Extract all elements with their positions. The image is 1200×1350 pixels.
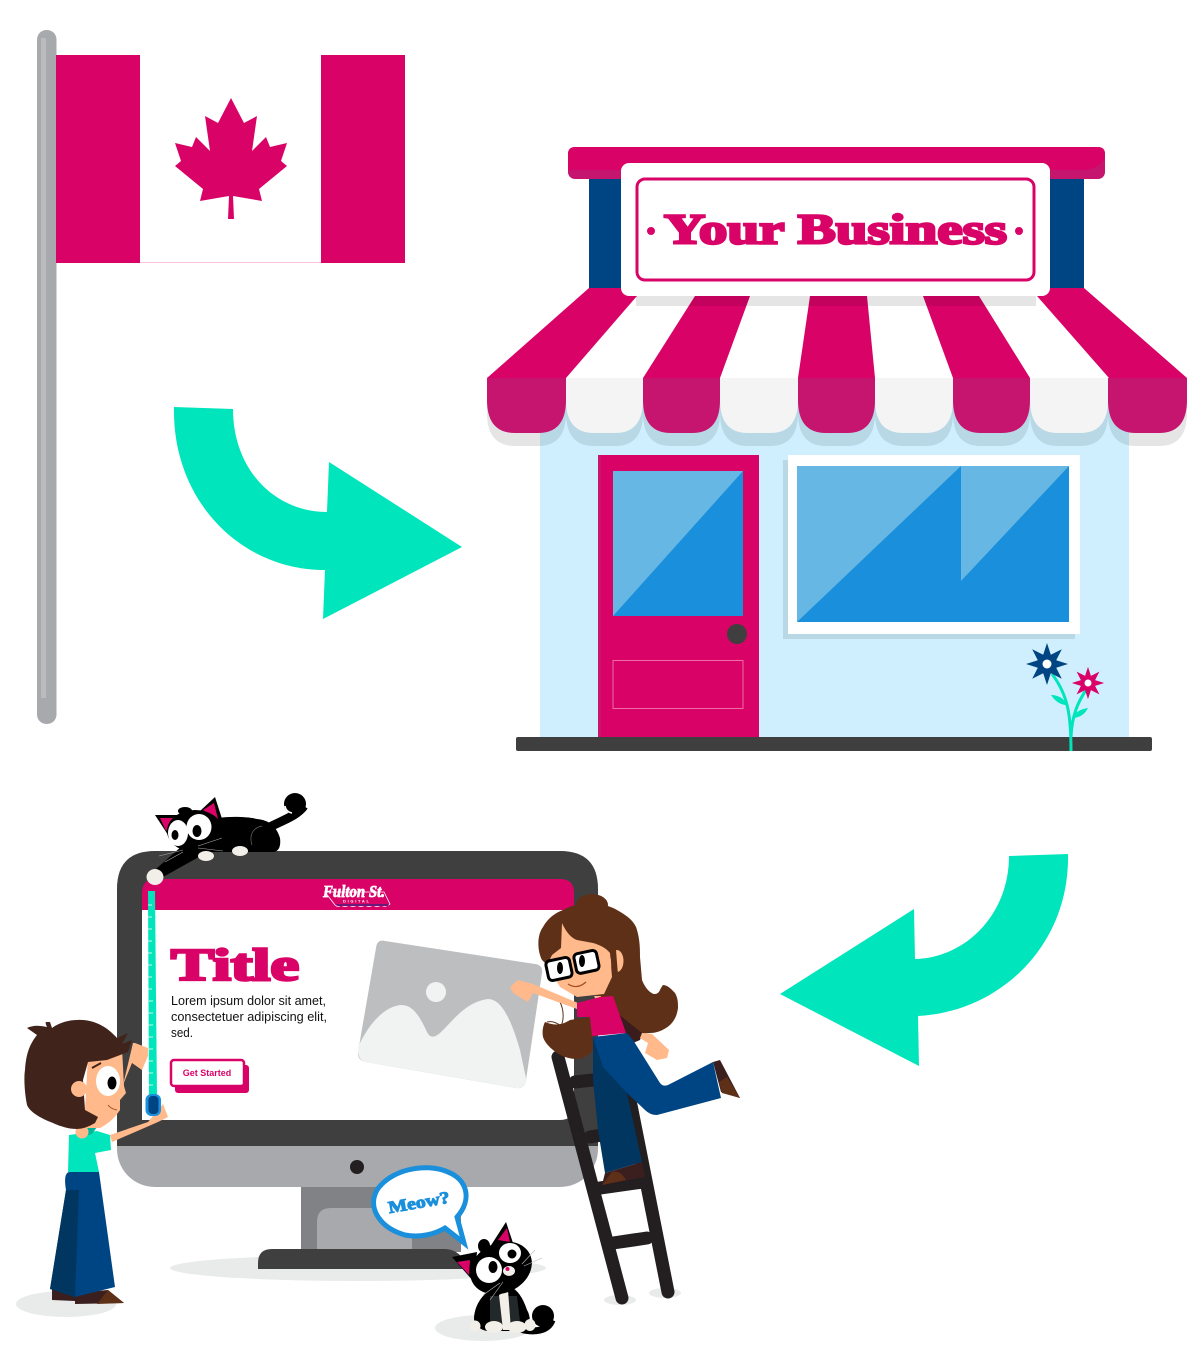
cat lying on monitor <box>146 793 306 885</box>
ground shadows <box>16 1255 681 1341</box>
boy shirt <box>68 1127 111 1172</box>
girl shoes <box>602 1060 740 1185</box>
girl hair bun <box>576 894 608 916</box>
logo: Fulton St. <box>322 882 385 901</box>
monitor body <box>117 851 598 1187</box>
flag cloth <box>56 55 405 263</box>
roof bar <box>568 147 1105 179</box>
cat eyes <box>168 814 212 846</box>
sitting cat eyes <box>476 1243 521 1283</box>
boy eyebrow <box>92 1063 101 1068</box>
boy smile <box>108 1105 117 1110</box>
arrow: flag to storefront <box>174 407 462 619</box>
girl front leg <box>593 1033 721 1115</box>
cat arm <box>146 846 206 885</box>
speech bubble <box>374 1168 466 1243</box>
monitor stand <box>301 1180 461 1252</box>
shop window <box>783 455 1080 639</box>
girl lower hair curl <box>543 1017 594 1059</box>
cat tail <box>266 793 306 829</box>
boy lower arm <box>110 1104 168 1142</box>
desktop monitor <box>117 851 598 1269</box>
website title: Title <box>171 940 299 990</box>
bubble text: Meow? <box>387 1188 451 1217</box>
boy ear <box>71 1081 87 1097</box>
awning scallops <box>487 378 1187 433</box>
business sign <box>621 163 1050 296</box>
awning shadow on wall <box>540 404 1129 446</box>
sitting cat <box>452 1222 554 1333</box>
camera dot <box>350 1160 364 1174</box>
ground strip <box>516 737 1152 751</box>
flag of Canada on a pole <box>37 30 405 724</box>
monitor base <box>258 1249 470 1269</box>
boy raised arm <box>123 1043 148 1085</box>
arrow: storefront to website <box>780 854 1068 1066</box>
ladder <box>558 1057 668 1298</box>
door <box>598 455 759 738</box>
girl hair back <box>538 903 678 1034</box>
girl ear <box>610 950 624 972</box>
girl glasses <box>545 950 600 981</box>
boy hair <box>24 1020 132 1129</box>
sitting cat paws <box>470 1319 536 1333</box>
cat head <box>167 807 223 852</box>
sitting cat tail <box>520 1305 554 1331</box>
sitting cat whiskers <box>483 1250 542 1300</box>
website screen <box>142 879 574 1120</box>
sitting cat chest stripe <box>490 1290 521 1330</box>
boy eye <box>96 1066 120 1096</box>
sitting cat head <box>461 1232 541 1304</box>
cat ears <box>155 797 224 838</box>
website body copy: consectetuer adipiscing elit, <box>171 1010 327 1024</box>
sign text: Your Business <box>664 208 1007 254</box>
boy neck <box>76 1126 88 1138</box>
girl neck <box>594 996 601 1002</box>
girl shirt <box>577 996 626 1036</box>
website header <box>142 879 574 910</box>
girl other arm <box>617 1013 669 1060</box>
measuring tape <box>146 891 161 1116</box>
maple leaf <box>175 98 287 219</box>
get started button <box>171 1060 249 1093</box>
blue posts <box>589 175 1084 290</box>
cat paws <box>198 846 248 861</box>
cat haunch line <box>251 826 262 845</box>
sitting cat body <box>474 1286 530 1331</box>
girl hair wisp <box>547 1002 563 1026</box>
storefront <box>487 147 1187 751</box>
website body copy <box>171 994 327 1040</box>
boy with measuring tape <box>24 1020 168 1304</box>
flag pole <box>37 30 56 724</box>
logo: DIGITAL <box>343 898 371 904</box>
sitting cat ears <box>452 1222 516 1282</box>
boy shoes <box>52 1288 124 1304</box>
shop wall <box>540 400 1129 738</box>
girl reaching arm <box>510 980 578 1009</box>
website body copy: Lorem ipsum dolor sit amet, <box>171 994 326 1008</box>
cat body <box>190 817 280 852</box>
girl face <box>547 923 612 997</box>
sitting cat nose <box>503 1266 515 1276</box>
cat whiskers <box>159 838 223 862</box>
image placeholder <box>358 941 542 1088</box>
girl on ladder <box>510 894 740 1185</box>
girl hair strand <box>604 945 618 1000</box>
awning outer shadow <box>487 390 1187 446</box>
boy trousers <box>50 1172 115 1297</box>
girl back leg <box>593 1037 642 1173</box>
get started button: Get Started <box>183 1068 231 1078</box>
boy face <box>77 1048 126 1128</box>
awning stripes <box>487 288 1187 378</box>
flowers <box>1026 643 1104 751</box>
website body copy: sed. <box>171 1026 193 1040</box>
girl smile <box>568 982 586 987</box>
